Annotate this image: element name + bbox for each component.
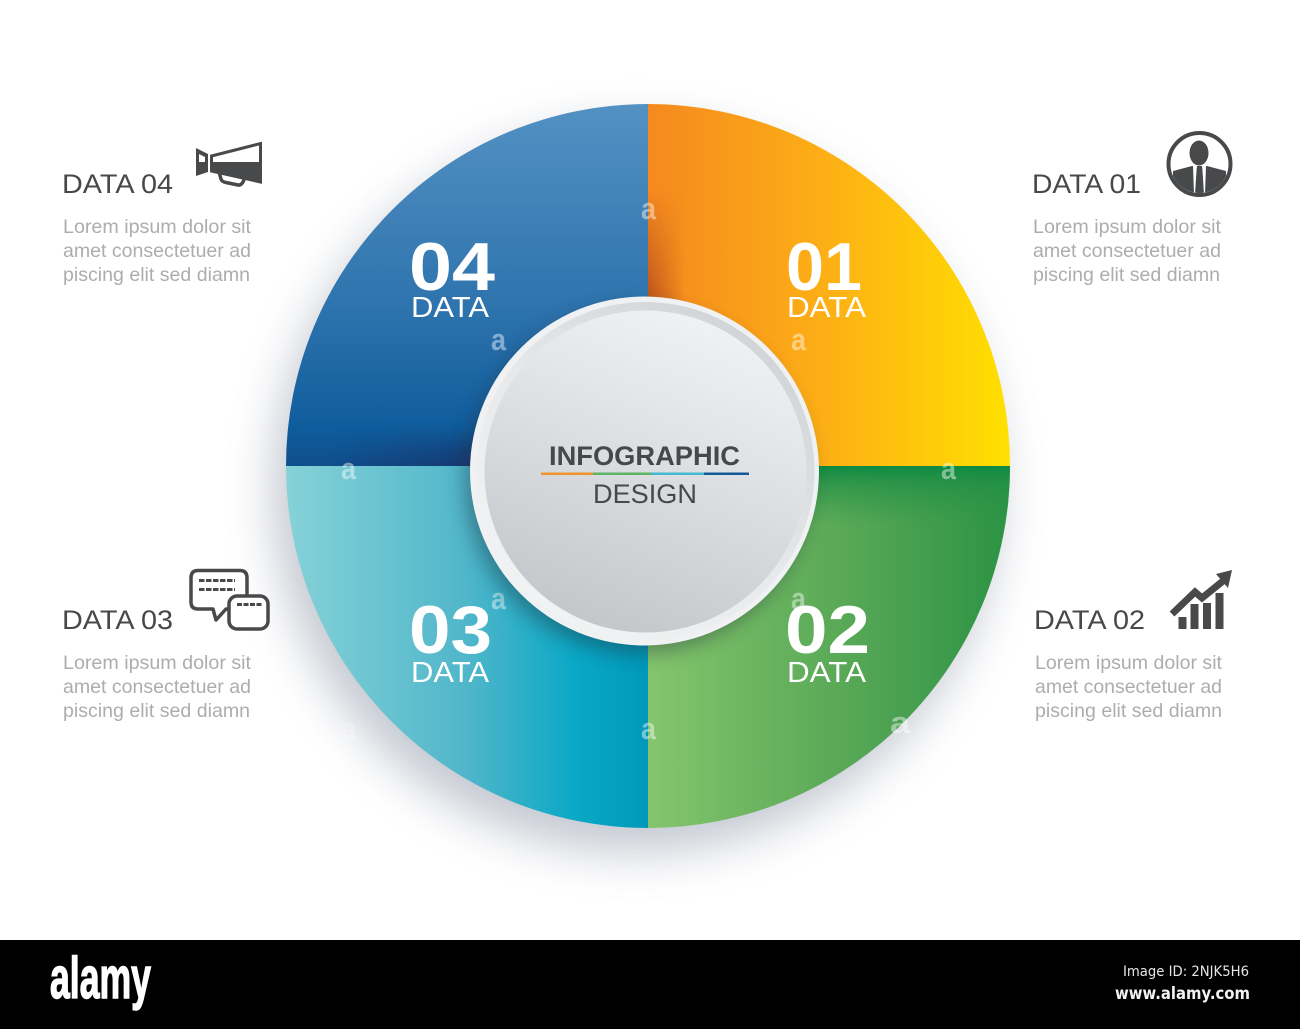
watermark marks: a: [491, 322, 507, 357]
image id: Image ID: 2NJK5H6: [1123, 964, 1249, 980]
watermark marks: a: [491, 581, 507, 616]
watermark marks: a: [641, 711, 657, 746]
watermark marks: a: [941, 451, 957, 486]
tricolour divider: [541, 472, 749, 475]
description: amet consectetuer ad: [63, 676, 251, 698]
description: Lorem ipsum dolor sit: [63, 652, 252, 674]
panel: data 02: [1034, 570, 1232, 722]
alamy logo: alamy: [50, 946, 151, 1011]
description: [63, 216, 252, 286]
watermark marks: a: [890, 705, 911, 740]
pie chart: four quadrants: [286, 104, 1010, 828]
icon: businessman: [1168, 133, 1230, 195]
heading: DATA 03: [62, 605, 173, 635]
quadrant 01 orange: [648, 104, 1010, 466]
description: Lorem ipsum dolor sit: [1035, 652, 1223, 674]
centre title: DESIGN: [593, 479, 697, 509]
description: piscing elit sed diamn: [1035, 700, 1222, 722]
watermark marks: a: [791, 581, 807, 616]
heading: DATA 04: [62, 169, 173, 199]
quadrant 04 blue: [286, 104, 648, 466]
segment label 02: 02: [785, 592, 870, 668]
heading: DATA 02: [1034, 605, 1145, 635]
description: piscing elit sed diamn: [1033, 264, 1220, 286]
icon: megaphone: [196, 144, 262, 185]
watermark marks: [341, 191, 957, 875]
segment label 01: 01: [786, 229, 862, 305]
description: amet consectetuer ad: [1035, 676, 1222, 698]
watermark marks: a: [491, 840, 507, 875]
description: [1035, 652, 1223, 722]
watermark marks: a: [791, 322, 807, 357]
segment label 03: 03: [409, 592, 492, 668]
description: Lorem ipsum dolor sit: [1033, 216, 1222, 238]
centre title: [541, 441, 749, 509]
watermark marks: a: [641, 191, 657, 226]
description: amet consectetuer ad: [1033, 240, 1221, 262]
segment label 04: 04: [409, 229, 495, 305]
description: [1033, 216, 1222, 286]
panel: data 03: [62, 570, 268, 722]
segment label 01: DATA: [787, 292, 867, 324]
description: Lorem ipsum dolor sit: [63, 216, 252, 238]
website: www.alamy.com: [1115, 984, 1250, 1003]
watermark marks: a: [341, 451, 357, 486]
segment label 04: DATA: [411, 292, 490, 324]
description: piscing elit sed diamn: [63, 264, 250, 286]
quadrant 03 teal: [286, 466, 648, 828]
heading: DATA 01: [1032, 169, 1141, 199]
description: [63, 652, 252, 722]
centre title: INFOGRAPHIC: [549, 441, 740, 471]
panel: data 04: [62, 144, 262, 286]
panel: data 01: [1032, 133, 1230, 286]
icon: growth chart: [1172, 570, 1232, 629]
segment label 02: [785, 592, 870, 689]
watermark marks: a: [341, 711, 357, 746]
segment label 03: DATA: [411, 657, 490, 689]
description: amet consectetuer ad: [63, 240, 251, 262]
circle drop shadow: [274, 128, 998, 852]
footer bar: [0, 940, 1300, 1029]
segment label 02: DATA: [787, 657, 867, 689]
centre disc: [464, 296, 819, 654]
description: piscing elit sed diamn: [63, 700, 250, 722]
quadrant 02 green: [648, 466, 1010, 828]
icon: speech bubbles: [191, 570, 268, 629]
